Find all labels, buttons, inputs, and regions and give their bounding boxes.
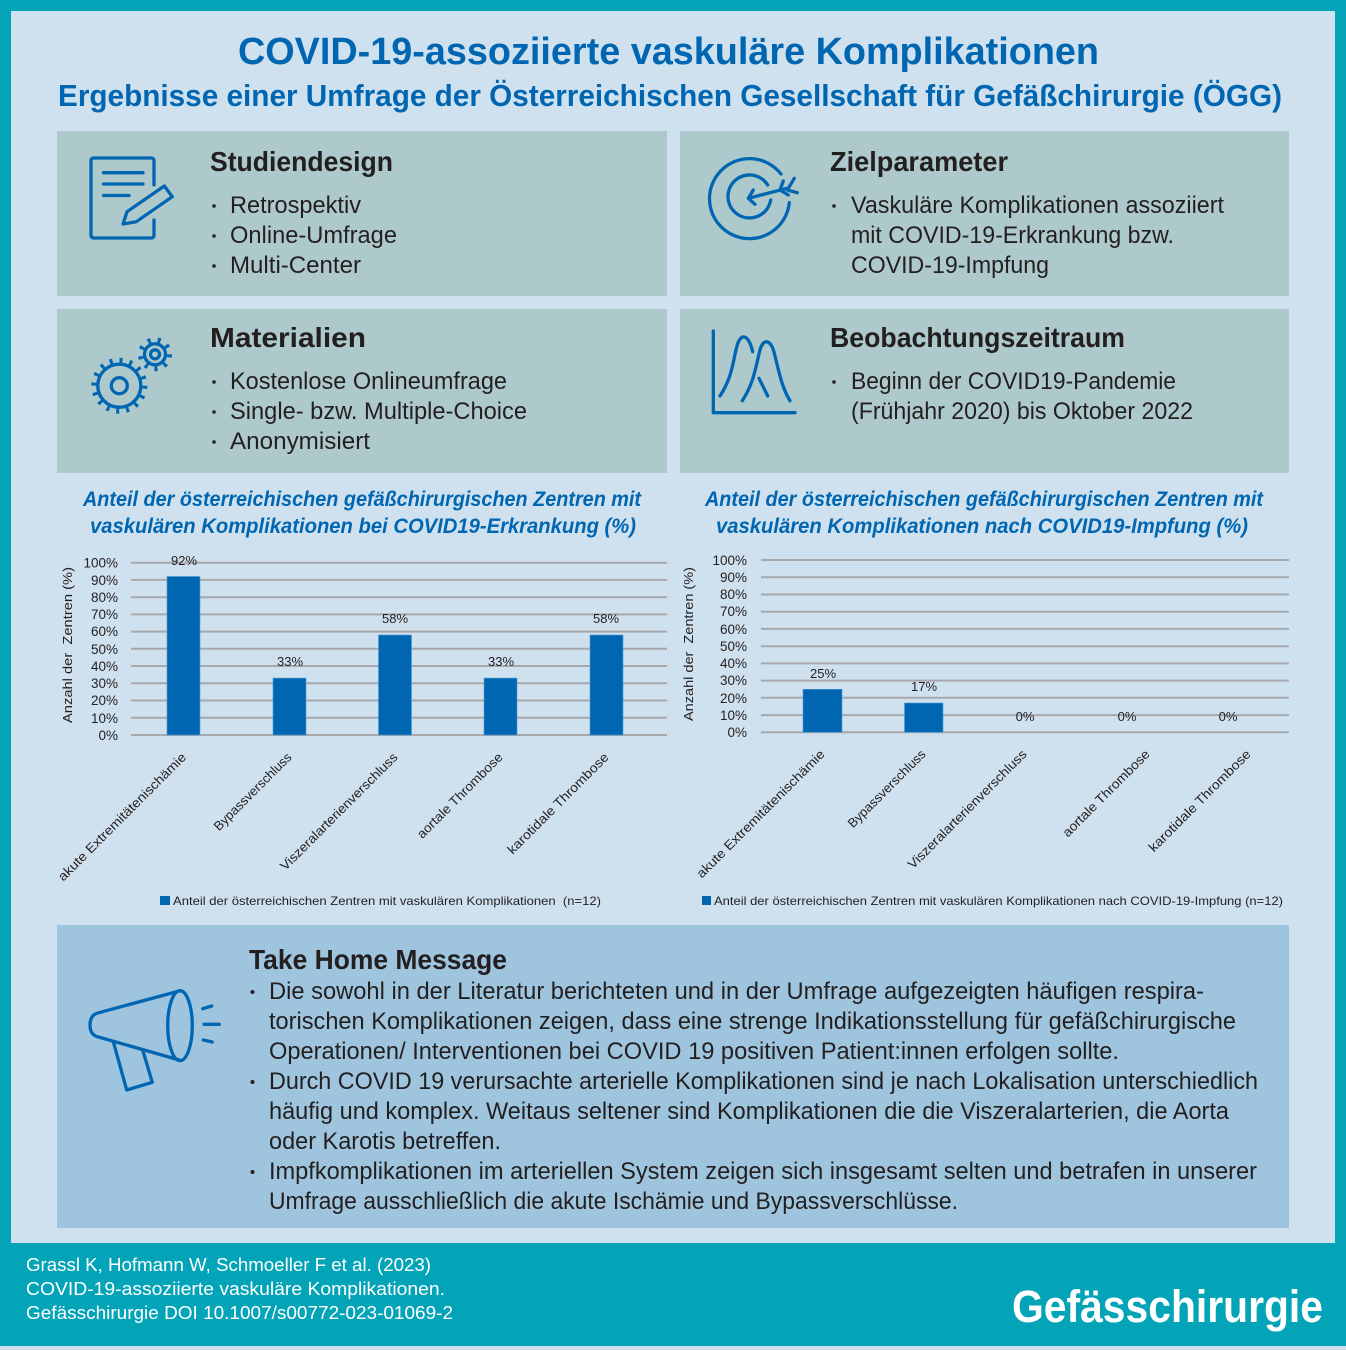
icon: target with arrow <box>710 159 797 239</box>
list: materials: Anonymisiert <box>230 428 370 455</box>
y axis ticks: 80% <box>720 587 747 602</box>
data labels: 92% <box>171 553 197 568</box>
list: study design: Retrospektiv <box>230 192 361 219</box>
y axis ticks: 100% <box>712 553 747 568</box>
bullet: arterial complications: häufig und komplex. Weitaus seltener sind Komplikationen die die Viszeralarterien, die Aorta <box>269 1098 1230 1125</box>
y axis ticks: 40% <box>91 659 118 674</box>
category labels: aortale Thrombose <box>414 750 506 841</box>
bullet: literature and survey <box>250 978 1236 1065</box>
bar chart: complications with COVID-19 disease <box>55 553 667 908</box>
bars <box>803 689 943 732</box>
bullet: vaccination complications: Impfkomplikationen im arteriellen System zeigen sich insgesamt selten und betrafen in unserer <box>269 1158 1257 1185</box>
data labels: 33% <box>277 654 303 669</box>
category labels: karotidale Thrombose <box>504 750 612 857</box>
category labels <box>693 746 1254 881</box>
list: study design: Multi-Center <box>230 252 361 279</box>
y axis ticks <box>712 553 747 740</box>
list: study design: Online-Umfrage <box>230 222 397 249</box>
y axis ticks: 10% <box>91 711 118 726</box>
y axis ticks: 20% <box>720 691 747 706</box>
bullet: literature and survey: Die sowohl in der Literatur berichteten und in der Umfrage aufgezeigten häufigen respira- <box>269 978 1204 1005</box>
chart heading: COVID-19 disease <box>82 488 642 538</box>
y axis ticks: 90% <box>91 573 118 588</box>
heading: Beobachtungszeitraum: Beobachtungszeitraum <box>830 322 1125 353</box>
category labels: Viszeralarterienverschluss <box>277 749 401 873</box>
y axis ticks: 30% <box>720 673 747 688</box>
icon: gears <box>94 340 169 411</box>
citation: Grassl K, Hofmann W, Schmoeller F et al. (2023) <box>26 1255 431 1275</box>
bullet: arterial complications: oder Karotis betreffen. <box>269 1128 501 1155</box>
y axis ticks: 70% <box>91 607 118 622</box>
y axis ticks: 60% <box>91 624 118 639</box>
y axis ticks: 50% <box>720 639 747 654</box>
category labels: Bypassverschluss <box>210 749 295 834</box>
bullet: vaccination complications: Umfrage ausschließlich die akute Ischämie und Bypassverschlüsse. <box>269 1188 958 1215</box>
list: observation period <box>832 368 1193 425</box>
citation <box>26 1255 453 1323</box>
list: materials: Kostenlose Onlineumfrage <box>230 368 507 395</box>
legend: Anteil der österreichischen Zentren mit vaskulären Komplikationen (n=12) <box>173 894 601 908</box>
y axis ticks: 0% <box>98 728 118 743</box>
list: study design <box>212 192 397 279</box>
data labels <box>810 666 1238 724</box>
data labels: 58% <box>593 611 619 626</box>
list: materials <box>212 368 527 455</box>
panel: Studiendesign <box>57 131 667 296</box>
data labels: 33% <box>488 654 514 669</box>
citation: COVID-19-assoziierte vaskuläre Komplikationen. <box>26 1279 445 1299</box>
data labels: 0% <box>1219 709 1238 724</box>
heading: Materialien: Materialien <box>210 322 366 353</box>
citation: Gefässchirurgie DOI 10.1007/s00772-023-01069-2 <box>26 1303 453 1323</box>
data labels: 0% <box>1016 709 1035 724</box>
list: endpoints: COVID-19-Impfung <box>851 252 1049 279</box>
y axis ticks: 100% <box>83 556 118 570</box>
chart heading: COVID-19 vaccination: vaskulären Komplikationen nach COVID19-Impfung (%) <box>716 515 1248 538</box>
y axis ticks: 70% <box>720 604 747 619</box>
chart heading: COVID-19 disease: vaskulären Komplikationen bei COVID19-Erkrankung (%) <box>90 515 636 538</box>
data labels: 0% <box>1118 709 1137 724</box>
data labels <box>171 553 619 669</box>
bar chart: complications after COVID-19 vaccination <box>681 553 1289 908</box>
list: materials: Single- bzw. Multiple-Choice <box>230 398 527 425</box>
title <box>58 31 1282 113</box>
list: observation period: Beginn der COVID19-Pandemie <box>851 368 1176 395</box>
bars <box>167 576 623 735</box>
list: endpoints: mit COVID-19-Erkrankung bzw. <box>851 222 1174 249</box>
data labels: 25% <box>810 666 836 681</box>
category labels: akute Extremitätenischämie <box>55 750 189 884</box>
bullet: literature and survey: torischen Komplikationen zeigen, dass eine strenge Indikationsstellung für gefäßchirurgische <box>269 1008 1236 1035</box>
y axis ticks: 60% <box>720 622 747 637</box>
category labels: Bypassverschluss <box>844 746 929 831</box>
icon: megaphone <box>90 991 219 1090</box>
y axis title: Anzahl der Zentren (%) <box>60 567 75 723</box>
title: Ergebnisse einer Umfrage der Österreichischen Gesellschaft für Gefäßchirurgie (ÖGG) <box>58 78 1282 113</box>
heading: Zielparameter: Zielparameter <box>830 146 1008 177</box>
list: endpoints: Vaskuläre Komplikationen assoziiert <box>851 192 1224 219</box>
panel: Zielparameter <box>680 131 1289 296</box>
bullet: vaccination complications <box>250 1158 1257 1215</box>
chart heading: COVID-19 vaccination: Anteil der österreichischen gefäßchirurgischen Zentren mit <box>704 488 1264 511</box>
bullet: literature and survey: Operationen/ Interventionen bei COVID 19 positiven Patient:innen erfolgen sollte. <box>269 1038 1119 1065</box>
icon: curves on axes <box>713 331 795 413</box>
bullet: arterial complications: Durch COVID 19 verursachte arterielle Komplikationen sind je nach Lokalisation unterschiedlich <box>269 1068 1258 1095</box>
bullet: arterial complications <box>250 1068 1258 1155</box>
y axis ticks: 0% <box>727 725 747 740</box>
category labels: Viszeralarterienverschluss <box>904 746 1030 872</box>
y axis ticks: 50% <box>91 642 118 657</box>
list: endpoints <box>832 192 1224 279</box>
y axis title: Anzahl der Zentren (%) <box>681 567 696 721</box>
y axis ticks: 20% <box>91 693 118 708</box>
panel: Take Home Message <box>57 925 1289 1228</box>
y axis ticks: 80% <box>91 590 118 605</box>
y axis ticks: 30% <box>91 676 118 691</box>
icon: document with pencil <box>91 158 172 238</box>
legend: Anteil der österreichischen Zentren mit vaskulären Komplikationen nach COVID-19-Impfung (n=12) <box>714 894 1283 908</box>
y axis ticks: 10% <box>720 708 747 723</box>
category labels <box>55 749 612 884</box>
heading: Studiendesign: Studiendesign <box>210 146 393 177</box>
category labels: karotidale Thrombose <box>1145 747 1254 855</box>
title: COVID-19-assoziierte vaskuläre Komplikationen <box>238 31 1099 73</box>
chart heading: COVID-19 vaccination <box>704 488 1264 538</box>
chart heading: COVID-19 disease: Anteil der österreichischen gefäßchirurgischen Zentren mit <box>82 488 642 511</box>
category labels: aortale Thrombose <box>1059 747 1153 840</box>
y axis ticks: 90% <box>720 570 747 585</box>
heading: Take Home Message: Take Home Message <box>249 944 507 975</box>
list: observation period: (Frühjahr 2020) bis Oktober 2022 <box>851 398 1193 425</box>
journal name: Gefässchirurgie <box>1012 1281 1323 1332</box>
y axis ticks <box>83 556 118 743</box>
panel: Beobachtungszeitraum <box>680 309 1289 473</box>
category labels: akute Extremitätenischämie <box>693 747 828 881</box>
data labels: 58% <box>382 611 408 626</box>
y axis ticks: 40% <box>720 656 747 671</box>
data labels: 17% <box>911 679 937 694</box>
panel: Materialien <box>57 309 667 473</box>
